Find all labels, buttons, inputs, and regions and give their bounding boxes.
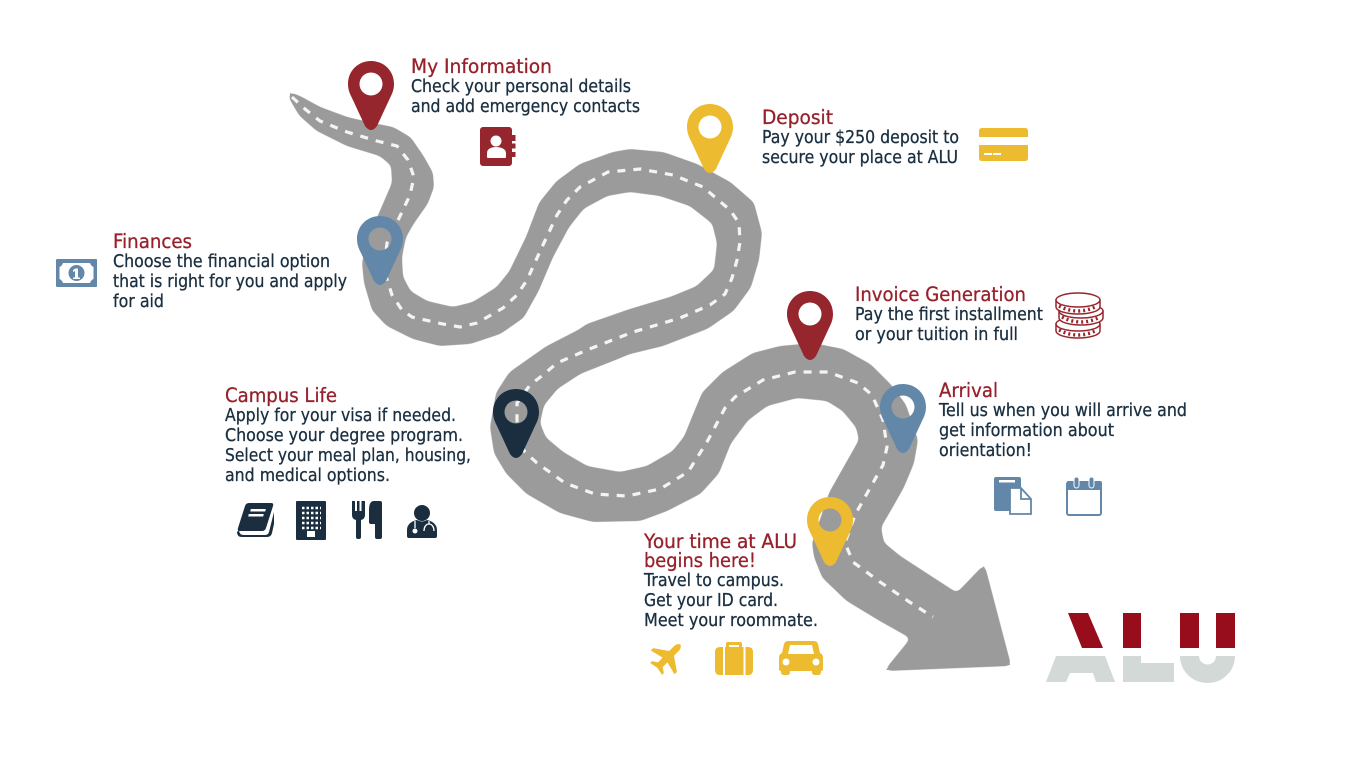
text block: arrival: get information about [939,421,1114,441]
ALU logo [1046,613,1235,683]
text block: campus life: Campus Life [225,384,337,407]
text block: your time at ALU: Get your ID card. [644,591,778,611]
text block: my information [411,55,640,117]
text block: arrival: orientation! [939,441,1032,461]
text block: invoice generation [855,283,1043,345]
text block: invoice generation: or your tuition in full [855,325,1018,345]
text block: campus life: and medical options. [225,466,390,486]
text block: deposit: Deposit [762,106,833,129]
text block: campus life: Choose your degree program. [225,426,463,446]
pin: finances [357,216,403,285]
text block: deposit: Pay your $250 deposit to [762,128,959,148]
text block: finances: that is right for you and apply [113,272,347,292]
icon: calendar [1067,477,1102,515]
text block: arrival [938,379,1187,461]
pin: campus life [493,389,539,458]
text block: your time at ALU: begins here! [644,549,756,572]
text block: arrival: Arrival [939,379,998,402]
icon: address book [480,127,516,166]
pin: arrival [880,384,926,453]
text block: arrival: Tell us when you will arrive and [938,401,1187,421]
icon: banknote [56,259,97,287]
icon: car [779,641,823,675]
pin: my information [348,61,394,130]
icon: book [237,503,274,537]
winding road [290,93,1010,670]
pin: your time at ALU [807,497,853,566]
icon: building [296,501,326,540]
text block: finances: Choose the financial option [113,252,330,272]
text block: finances [113,230,347,312]
icon: suitcase [715,642,753,675]
text block: finances: Finances [113,230,192,253]
icon: documents [994,477,1031,514]
text block: your time at ALU: Meet your roommate. [644,611,818,631]
text block: my information: and add emergency contacts [411,97,640,117]
text block: finances: for aid [113,292,164,312]
text block: deposit [762,106,959,168]
icon: credit card [979,128,1028,161]
text block: my information: My Information [411,55,552,78]
text block: campus life: Select your meal plan, housing, [225,446,471,466]
text block: your time at ALU [643,530,818,631]
text block: invoice generation: Pay the first installment [855,305,1043,325]
text block: your time at ALU: Travel to campus. [643,571,784,591]
text block: invoice generation: Invoice Generation [855,283,1026,306]
icon: fork and knife [352,501,382,539]
text block: your time at ALU: Your time at ALU [643,530,797,553]
icon: coins [1056,293,1103,338]
pin: invoice generation [787,291,833,360]
icon: doctor [407,505,437,538]
text block: my information: Check your personal details [411,77,631,97]
pin: deposit [687,104,733,173]
text block: campus life [225,384,471,486]
text block: campus life: Apply for your visa if needed. [225,406,456,426]
icon: plane [644,633,692,681]
text block: deposit: secure your place at ALU [762,148,958,168]
